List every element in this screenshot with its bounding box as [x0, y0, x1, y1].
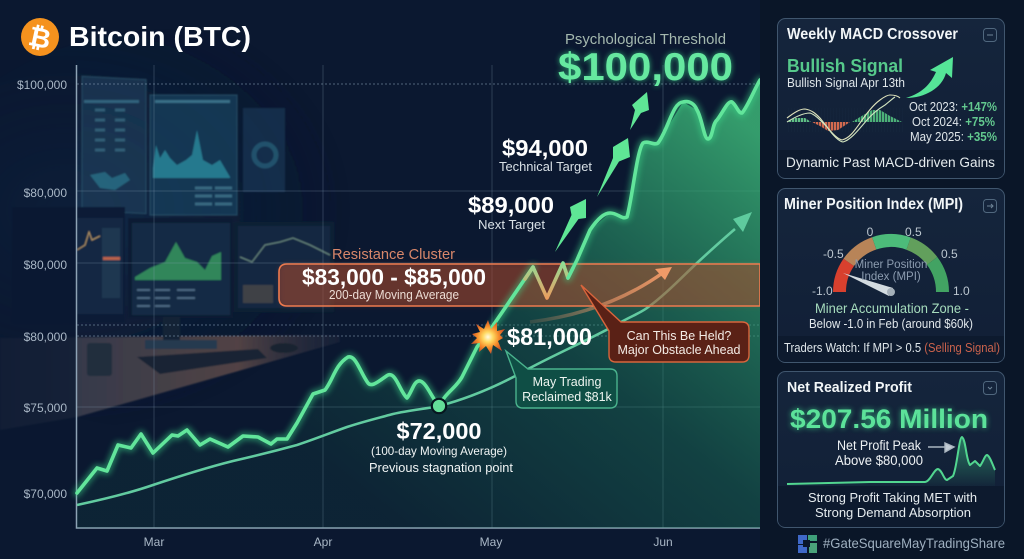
background scene: trading desk with monitors: [0, 30, 430, 430]
psychological threshold label: Psychological Threshold: [565, 32, 726, 48]
y axis labels: $80,000: [24, 186, 67, 200]
panel: net realized profit: [778, 372, 1004, 528]
logo: bitcoin: ₿: [26, 21, 54, 56]
y axis labels: $80,000: [24, 330, 67, 344]
next target label: [468, 192, 554, 232]
y axis labels: [17, 78, 67, 501]
historical gains list: Oct 2023: +147%: [909, 100, 997, 114]
gauge: Index (MPI): [861, 271, 921, 283]
right column background: [760, 0, 1024, 559]
hashtag logo icon: [798, 535, 817, 553]
panel: miner position index: [778, 188, 1004, 362]
footer note: Strong Profit Taking MET with: [808, 490, 977, 505]
profit value: $207.56 Million: [790, 404, 988, 434]
heading: Miner Position Index (MPI): [784, 196, 963, 213]
icon: panel button: [984, 382, 996, 394]
resistance band text: [302, 264, 486, 302]
callout: may trading: [506, 351, 617, 408]
orange curved arrow: [530, 267, 672, 322]
gauge: Miner Position: [855, 259, 927, 271]
resistance band text: 200-day Moving Average: [329, 288, 459, 302]
hashtag text: #GateSquareMayTradingShare: [823, 535, 1005, 551]
sparkline: [787, 437, 995, 486]
chart grid lines: [77, 65, 760, 528]
main price line: [77, 80, 760, 493]
next target label: Next Target: [478, 218, 546, 232]
y axis labels: $80,000: [24, 258, 67, 272]
100-day moving average line with arrow: [77, 212, 752, 505]
heading: Net Realized Profit: [787, 379, 912, 396]
icon: panel button: [984, 28, 996, 42]
signal title: Bullish Signal: [787, 55, 903, 76]
historical gains list: May 2025: +35%: [910, 130, 997, 144]
panel: weekly MACD crossover: [778, 18, 1004, 178]
x axis labels: [144, 535, 673, 549]
historical gains list: Oct 2024: +75%: [912, 115, 995, 129]
moving average touch point: [432, 399, 446, 413]
left axis shade: [0, 60, 76, 460]
footer note: [808, 490, 977, 520]
title: Bitcoin (BTC): [69, 21, 251, 52]
x axis labels: Apr: [314, 535, 332, 549]
y axis labels: $75,000: [24, 401, 67, 415]
icon: panel button: [984, 200, 996, 212]
chart axes: [76, 65, 760, 528]
grey arrow: [928, 443, 954, 452]
profit value: $207.56 Million: [790, 404, 988, 434]
gauge: 0.5: [905, 225, 922, 239]
label: 72,000: Previous stagnation point: [369, 461, 514, 475]
gauge: -1.0: [812, 284, 833, 298]
callout: may trading: Reclaimed $81k: [522, 390, 613, 404]
zone detail: Below -1.0 in Feb (around $60k): [809, 317, 973, 331]
x axis labels: Jun: [653, 535, 673, 549]
x axis labels: May: [480, 535, 502, 549]
gauge: 1.0: [953, 284, 970, 298]
price label 81,000: $81,000: [507, 324, 592, 351]
psychological threshold label: $100,000: [558, 46, 733, 89]
gauge: 0.5: [941, 247, 958, 261]
footer note: Dynamic Past MACD-driven Gains: [786, 155, 995, 170]
label: 72,000: (100-day Moving Average): [371, 444, 507, 458]
peak label: Net Profit Peak: [837, 438, 921, 453]
technical target label: Technical Target: [499, 160, 593, 174]
explosion icon: [471, 320, 505, 354]
zone heading: Miner Accumulation Zone -: [815, 300, 969, 316]
up arrow: [906, 57, 953, 98]
technical target label: [499, 135, 593, 174]
peak label: [835, 438, 923, 468]
gauge: [812, 225, 970, 298]
callout: major obstacle: Major Obstacle Ahead: [618, 343, 741, 357]
x axis labels: Mar: [144, 535, 164, 549]
signal date: Bullish Signal Apr 13th: [787, 76, 905, 90]
peak label: Above $80,000: [835, 453, 923, 468]
label: 72,000: $72,000: [397, 418, 481, 444]
target arrows: [555, 92, 649, 252]
resistance band: [279, 264, 760, 306]
callout: major obstacle: [581, 285, 749, 362]
area under price line: [77, 80, 760, 528]
resistance cluster heading: Resistance Cluster: [332, 246, 455, 263]
technical target label: $94,000: [502, 135, 588, 161]
gauge: -0.5: [823, 247, 844, 261]
historical gains list: [909, 100, 997, 144]
gauge: 0: [867, 225, 874, 239]
resistance band text: $83,000 - $85,000: [302, 264, 486, 290]
y axis labels: $70,000: [24, 487, 67, 501]
heading: Weekly MACD Crossover: [787, 26, 958, 43]
logo: bitcoin: [21, 18, 59, 56]
footer note: Strong Demand Absorption: [815, 505, 971, 520]
callout: major obstacle: Can This Be Held?: [627, 329, 731, 343]
label: 72,000: [369, 418, 514, 475]
callout: may trading: May Trading: [533, 375, 601, 389]
next target label: $89,000: [468, 192, 554, 218]
psychological threshold label: $100,000: [558, 46, 733, 89]
y axis labels: $100,000: [17, 78, 67, 92]
MACD mini chart: [787, 95, 903, 142]
footer note: Traders Watch: If MPI > 0.5 (Selling Signal): [784, 341, 1000, 355]
